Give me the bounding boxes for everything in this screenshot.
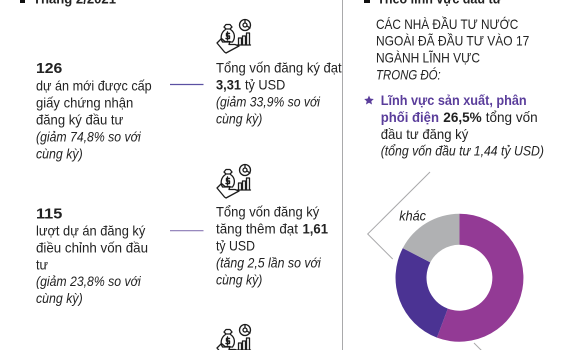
icon: money bag and chart 3	[217, 324, 250, 350]
text block: electricity sector 26,5%: tổng vốn	[486, 109, 538, 125]
text block: 17 sectors intro	[376, 16, 529, 82]
text block: 126 new projects: cùng kỳ)	[36, 146, 83, 162]
text block: total registered capital 3,31: Tổng vốn đăng ký đạt	[216, 60, 342, 76]
label: khác: khác	[399, 208, 426, 224]
text block: electricity sector 26,5%	[381, 92, 544, 159]
icon: money bag and chart 2	[217, 164, 250, 198]
text block: 115 adjusted projects: điều chỉnh vốn đầu	[36, 240, 148, 256]
slice: electricity	[437, 214, 523, 342]
text block: 17 sectors intro: TRONG ĐÓ:	[376, 66, 441, 82]
icon: money bag and chart 1	[217, 20, 250, 53]
icon: star bullet	[364, 96, 374, 104]
text block: electricity sector 26,5%: đầu tư đăng ký	[381, 126, 468, 142]
connector line 2	[170, 230, 204, 232]
text block: 126 new projects	[36, 60, 152, 162]
text block: total registered capital 3,31: cùng kỳ)	[216, 110, 262, 126]
text block: 115 adjusted projects	[36, 206, 148, 306]
text block: 115 adjusted projects: cùng kỳ)	[36, 290, 83, 306]
text block: total registered capital 3,31: 3,31	[216, 76, 241, 92]
text block: 17 sectors intro: NGÀNH LĨNH VỰC	[376, 50, 480, 66]
text block: total registered capital 3,31: (giảm 33,9% so với	[216, 94, 321, 110]
text block: total registered capital 3,31	[216, 60, 342, 126]
text block: 115 adjusted projects: 115	[36, 206, 62, 222]
text block: 17 sectors intro: CÁC NHÀ ĐẦU TƯ NƯỚC	[376, 16, 518, 32]
callout lines for the donut	[368, 172, 482, 350]
text block: electricity sector 26,5%: Lĩnh vực sản xuất, phân	[381, 92, 527, 108]
text block: total capital increase 1,61: 1,61	[302, 220, 328, 236]
connector line 1	[170, 84, 204, 86]
text block: 17 sectors intro: NGOÀI ĐÃ ĐẦU TƯ VÀO 17	[376, 33, 529, 49]
text block: total capital increase 1,61: tăng thêm đạt	[216, 220, 298, 236]
text block: 115 adjusted projects: (giảm 23,8% so với	[36, 273, 141, 289]
slice: other	[403, 214, 460, 262]
text block: 115 adjusted projects: tư	[36, 256, 48, 272]
donut chart: sector shares	[396, 214, 523, 342]
text block: 126 new projects: 126	[36, 60, 62, 77]
text block: total capital increase 1,61: (tăng 2,5 lần so với	[216, 254, 321, 270]
text block: total capital increase 1,61: cùng kỳ)	[216, 272, 262, 288]
slice: second sector	[396, 248, 448, 338]
text block: electricity sector 26,5%: (tổng vốn đầu tư 1,44 tỷ USD)	[381, 143, 544, 159]
text block: 126 new projects: giấy chứng nhận	[36, 94, 133, 110]
text block: total registered capital 3,31: tỷ USD	[245, 76, 285, 92]
text block: total capital increase 1,61: tỷ USD	[216, 238, 255, 254]
text block: total capital increase 1,61	[216, 204, 328, 288]
text block: 126 new projects: đăng ký đầu tư	[36, 112, 123, 128]
text block: total capital increase 1,61: Tổng vốn đăng ký	[216, 204, 319, 220]
text block: electricity sector 26,5%: 26,5%	[443, 109, 482, 125]
text block: 115 adjusted projects: lượt dự án đăng ký	[36, 222, 145, 238]
text block: 126 new projects: (giảm 74,8% so với	[36, 128, 141, 144]
text block: electricity sector 26,5%: phối điện	[381, 109, 439, 125]
text block: 126 new projects: dự án mới được cấp	[36, 78, 152, 94]
